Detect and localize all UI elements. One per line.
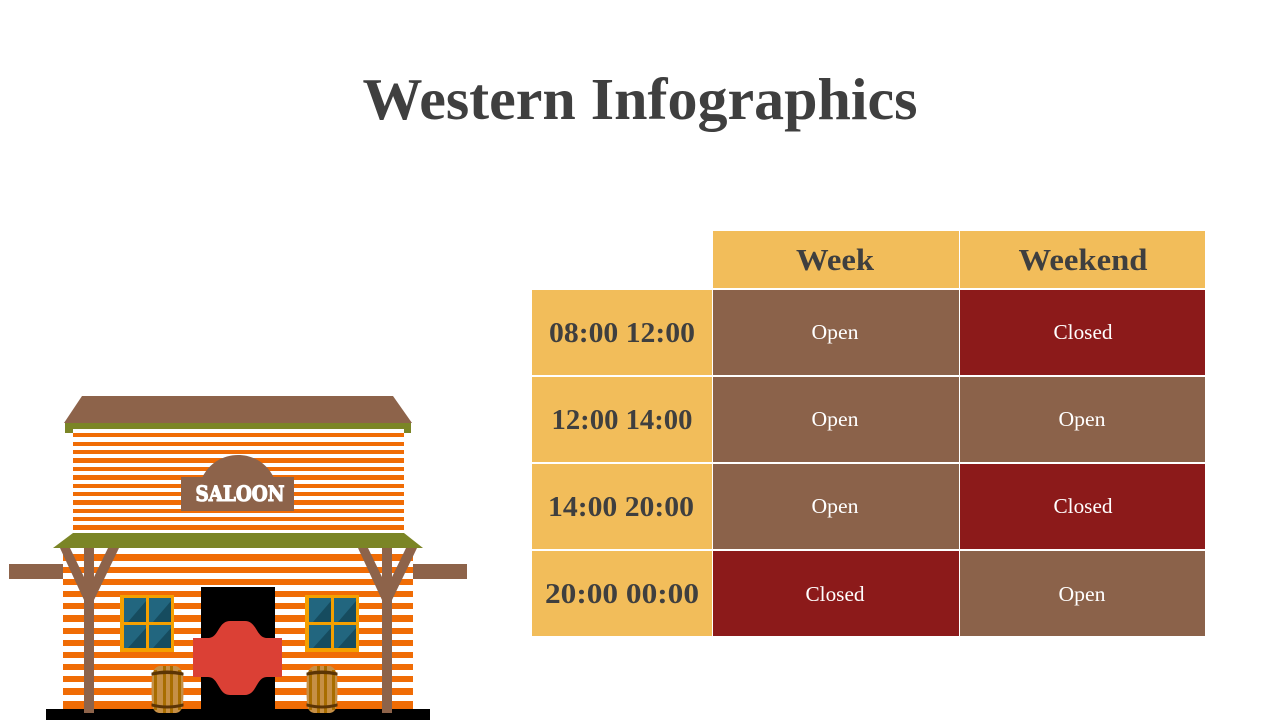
column header: Weekend: Weekend bbox=[1018, 242, 1148, 277]
row 1: Open bbox=[812, 320, 859, 344]
row 1 bbox=[532, 290, 1205, 375]
left post bbox=[60, 548, 119, 713]
row 2: 12:00 14:00 bbox=[552, 404, 692, 436]
row 2: Open bbox=[1058, 407, 1106, 431]
column header: Weekend bbox=[960, 231, 1205, 288]
right post bbox=[358, 548, 417, 713]
saloon sign bbox=[181, 455, 294, 511]
saloon doorway bbox=[201, 587, 275, 709]
roof bbox=[64, 396, 412, 433]
row 4: Open bbox=[1058, 582, 1106, 606]
right window bbox=[305, 595, 359, 652]
row 3: Open bbox=[812, 494, 859, 518]
row 4: 20:00 00:00 bbox=[545, 578, 699, 610]
row 4: Closed bbox=[806, 582, 865, 606]
swing doors bbox=[193, 621, 282, 695]
porch awning bbox=[53, 533, 423, 548]
title: Western Infographics bbox=[362, 66, 918, 132]
row 3: 14:00 20:00 bbox=[548, 491, 694, 523]
left barrel bbox=[152, 666, 184, 713]
saloon upper storey bbox=[73, 429, 404, 534]
row 2 bbox=[532, 377, 1205, 462]
ground bbox=[46, 709, 430, 720]
row 1: 08:00 12:00 bbox=[549, 317, 695, 349]
left window bbox=[120, 595, 174, 652]
row 3 bbox=[532, 464, 1205, 549]
row 1: Closed bbox=[1054, 320, 1113, 344]
schedule table bbox=[532, 231, 1205, 636]
saloon sign: SALOON bbox=[196, 481, 284, 506]
right side beam bbox=[413, 564, 467, 579]
illustration: saloon building bbox=[9, 396, 467, 720]
saloon lower storey bbox=[63, 548, 413, 709]
column header: Week: Week bbox=[796, 242, 875, 277]
column header: Week bbox=[713, 231, 959, 288]
right barrel bbox=[306, 666, 338, 713]
row 2: Open bbox=[812, 407, 859, 431]
row 4 bbox=[532, 551, 1205, 636]
row 3: Closed bbox=[1054, 494, 1113, 518]
left side beam bbox=[9, 564, 63, 579]
